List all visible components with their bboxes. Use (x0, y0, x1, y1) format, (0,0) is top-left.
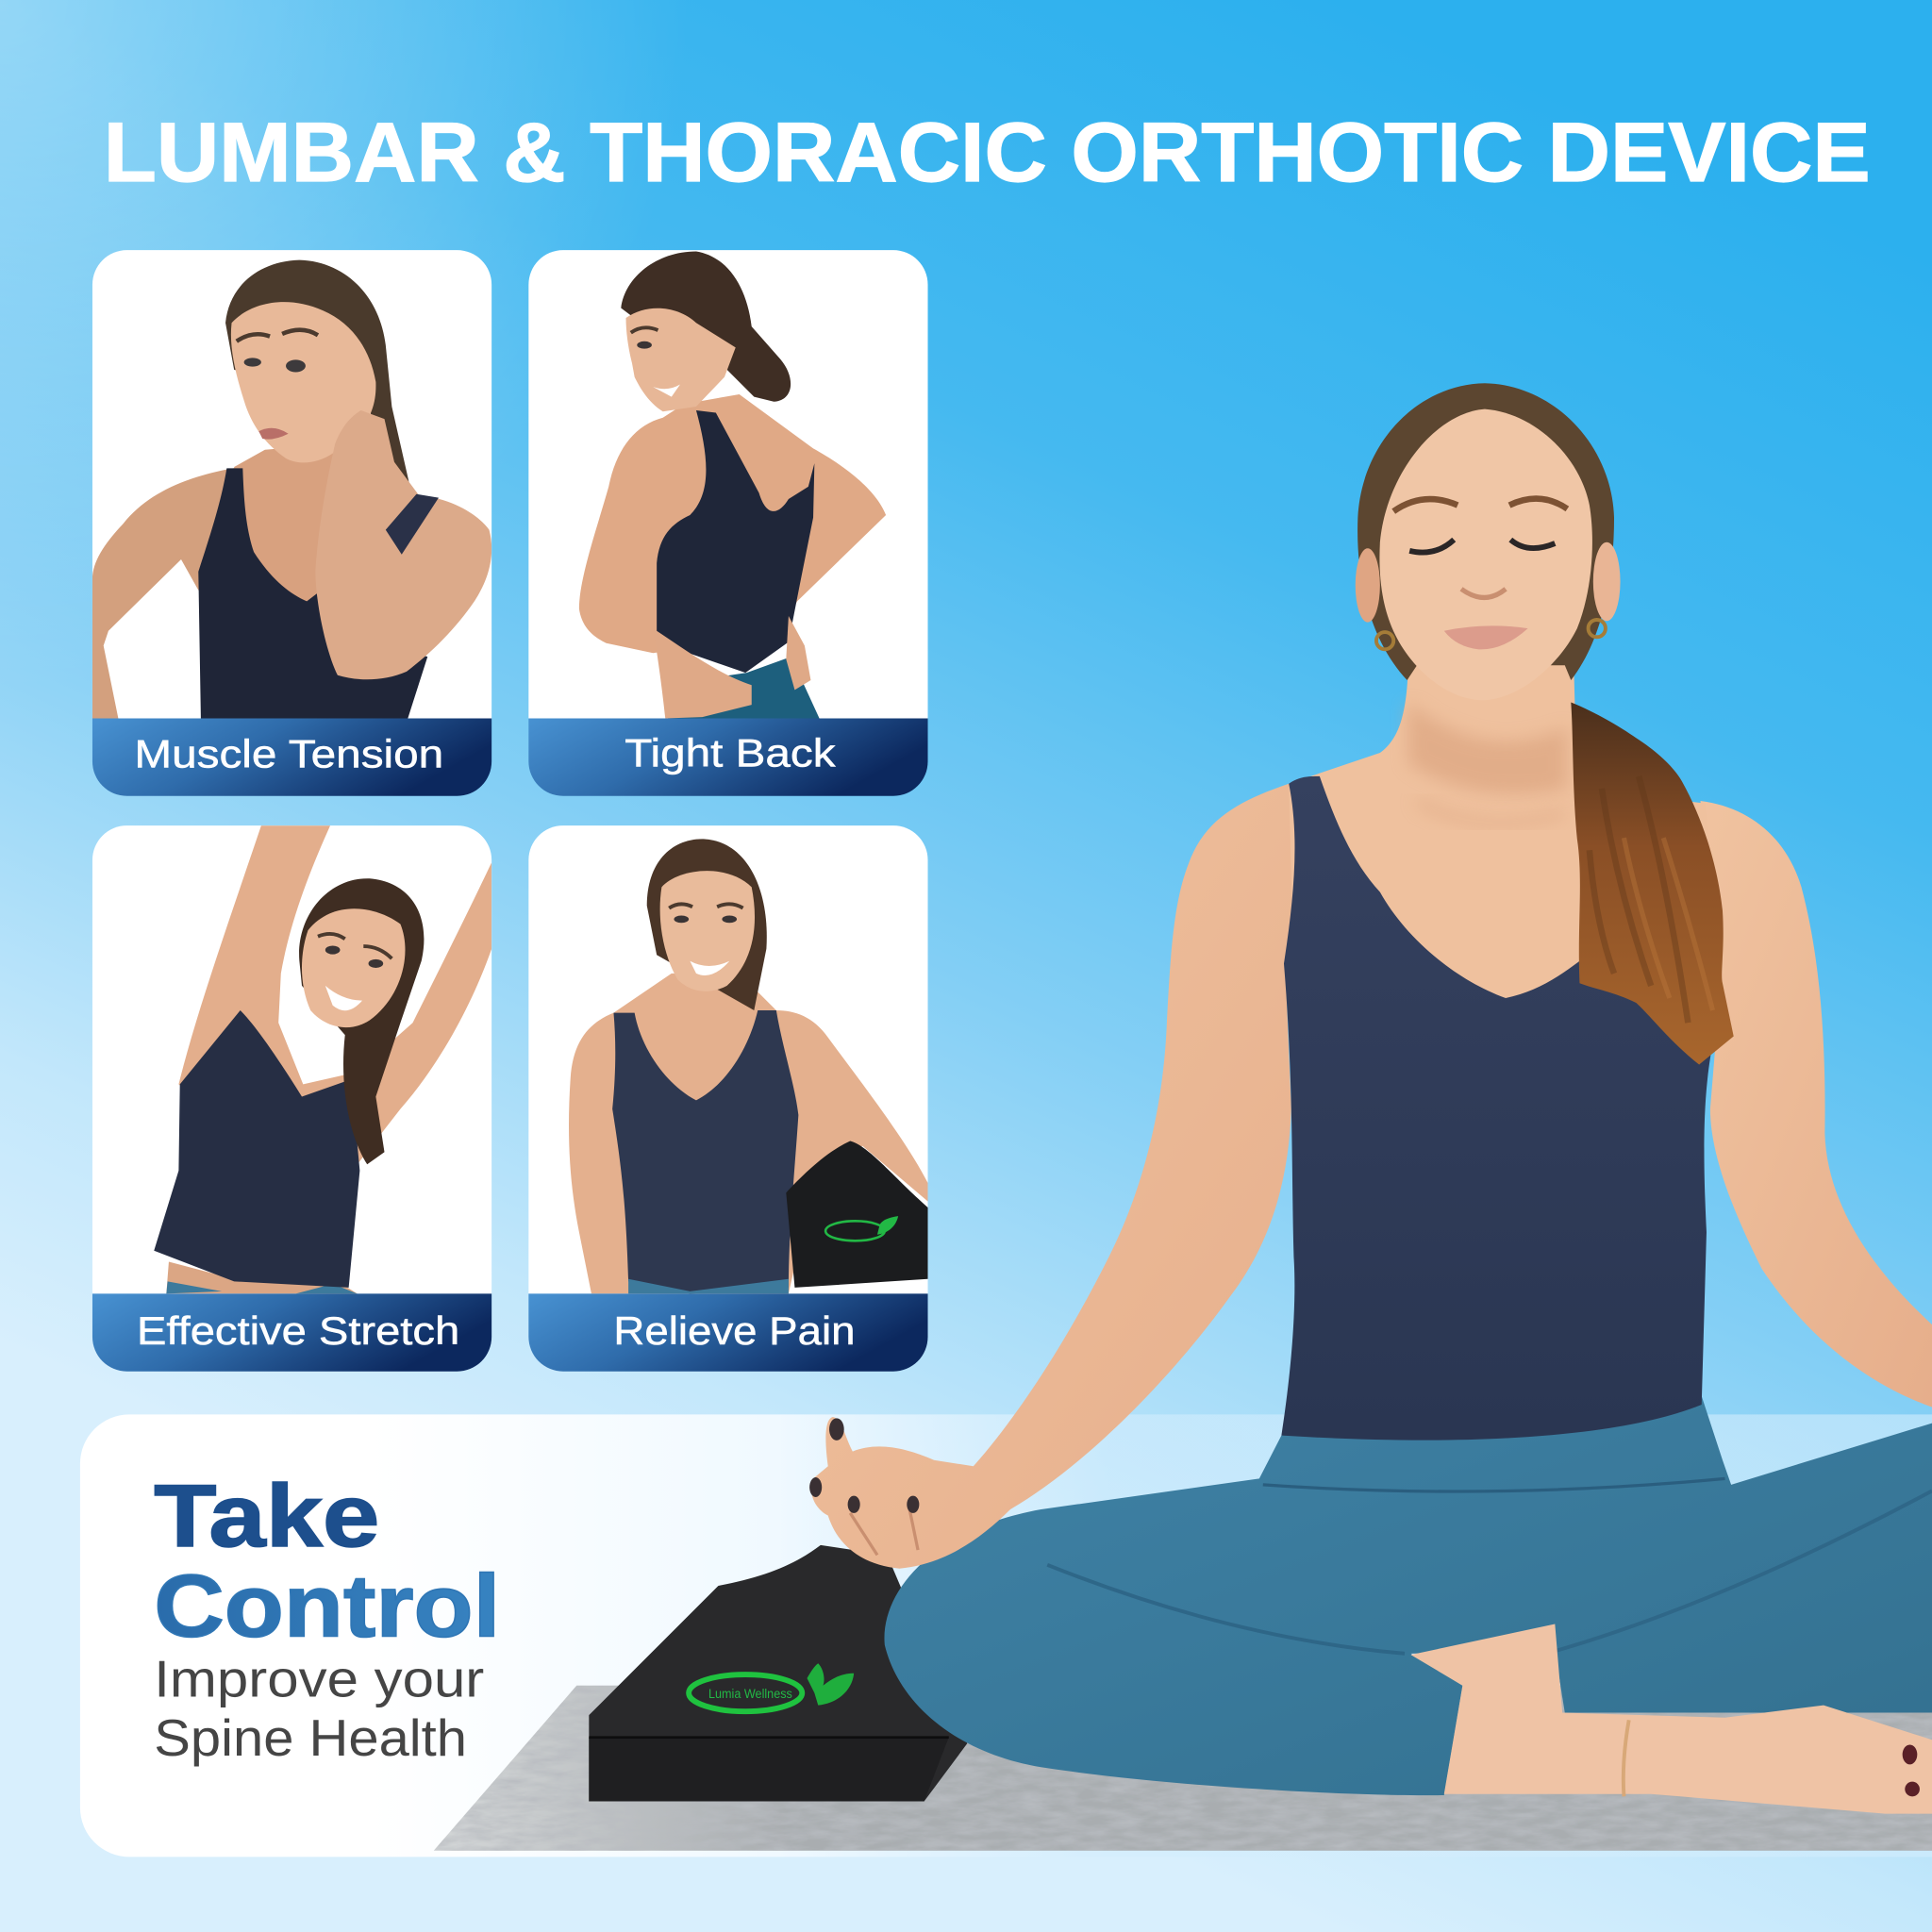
label: Muscle Tension: Muscle Tension (134, 732, 443, 776)
logo: Lumia Wellness: Lumia Wellness (708, 1687, 792, 1701)
label: Muscle Tension (92, 718, 491, 796)
face details (237, 330, 318, 440)
figure: woman holding back (579, 251, 886, 718)
figure: woman stretching (154, 825, 491, 1293)
logo: Lumia Wellness (689, 1663, 854, 1711)
label: Effective Stretch (92, 1293, 491, 1372)
feet and shins (1411, 1624, 1932, 1814)
ponytail (1571, 702, 1734, 1064)
label: Effective Stretch: Effective Stretch (137, 1308, 459, 1353)
label: Tight Back: Tight Back (625, 730, 836, 774)
main figure: woman meditating (809, 383, 1932, 1814)
label: Relieve Pain: Relieve Pain (613, 1308, 855, 1353)
neck and chest (1289, 653, 1725, 1004)
label: Tight Back (528, 718, 928, 796)
heading: Take Control: Control (154, 1557, 500, 1656)
text: improve your spine health (154, 1650, 484, 1767)
heading: Take Control (154, 1466, 500, 1656)
text: improve your spine health: Improve your (154, 1650, 484, 1708)
yoga mat (434, 1686, 1932, 1851)
label: Relieve Pain (528, 1293, 928, 1372)
panel: effective stretch card (92, 825, 491, 1372)
title: LUMBAR & THORACIC ORTHOTIC DEVICE (104, 106, 1871, 199)
panel: take control (80, 1414, 1932, 1857)
device held under arm (786, 1141, 928, 1288)
tank top (1281, 776, 1723, 1441)
text: improve your spine health: Spine Health (154, 1708, 467, 1767)
panel: muscle tension card (92, 250, 491, 796)
panel: tight back card (528, 250, 928, 796)
panel: relieve pain card (528, 825, 928, 1372)
face details (1393, 499, 1567, 649)
face details (631, 327, 680, 397)
far tank strap (386, 494, 439, 555)
heading: Take Control: Take (154, 1466, 379, 1565)
head and hair (1356, 383, 1621, 700)
right arm (1700, 801, 1932, 1407)
figure: woman holding neck (92, 260, 491, 718)
figure: woman with device (569, 839, 928, 1293)
left arm and hand (809, 784, 1324, 1569)
legs and leggings (884, 1392, 1932, 1795)
face details (669, 904, 743, 975)
device: lumbar wedge (589, 1545, 967, 1802)
face details (318, 934, 391, 1010)
